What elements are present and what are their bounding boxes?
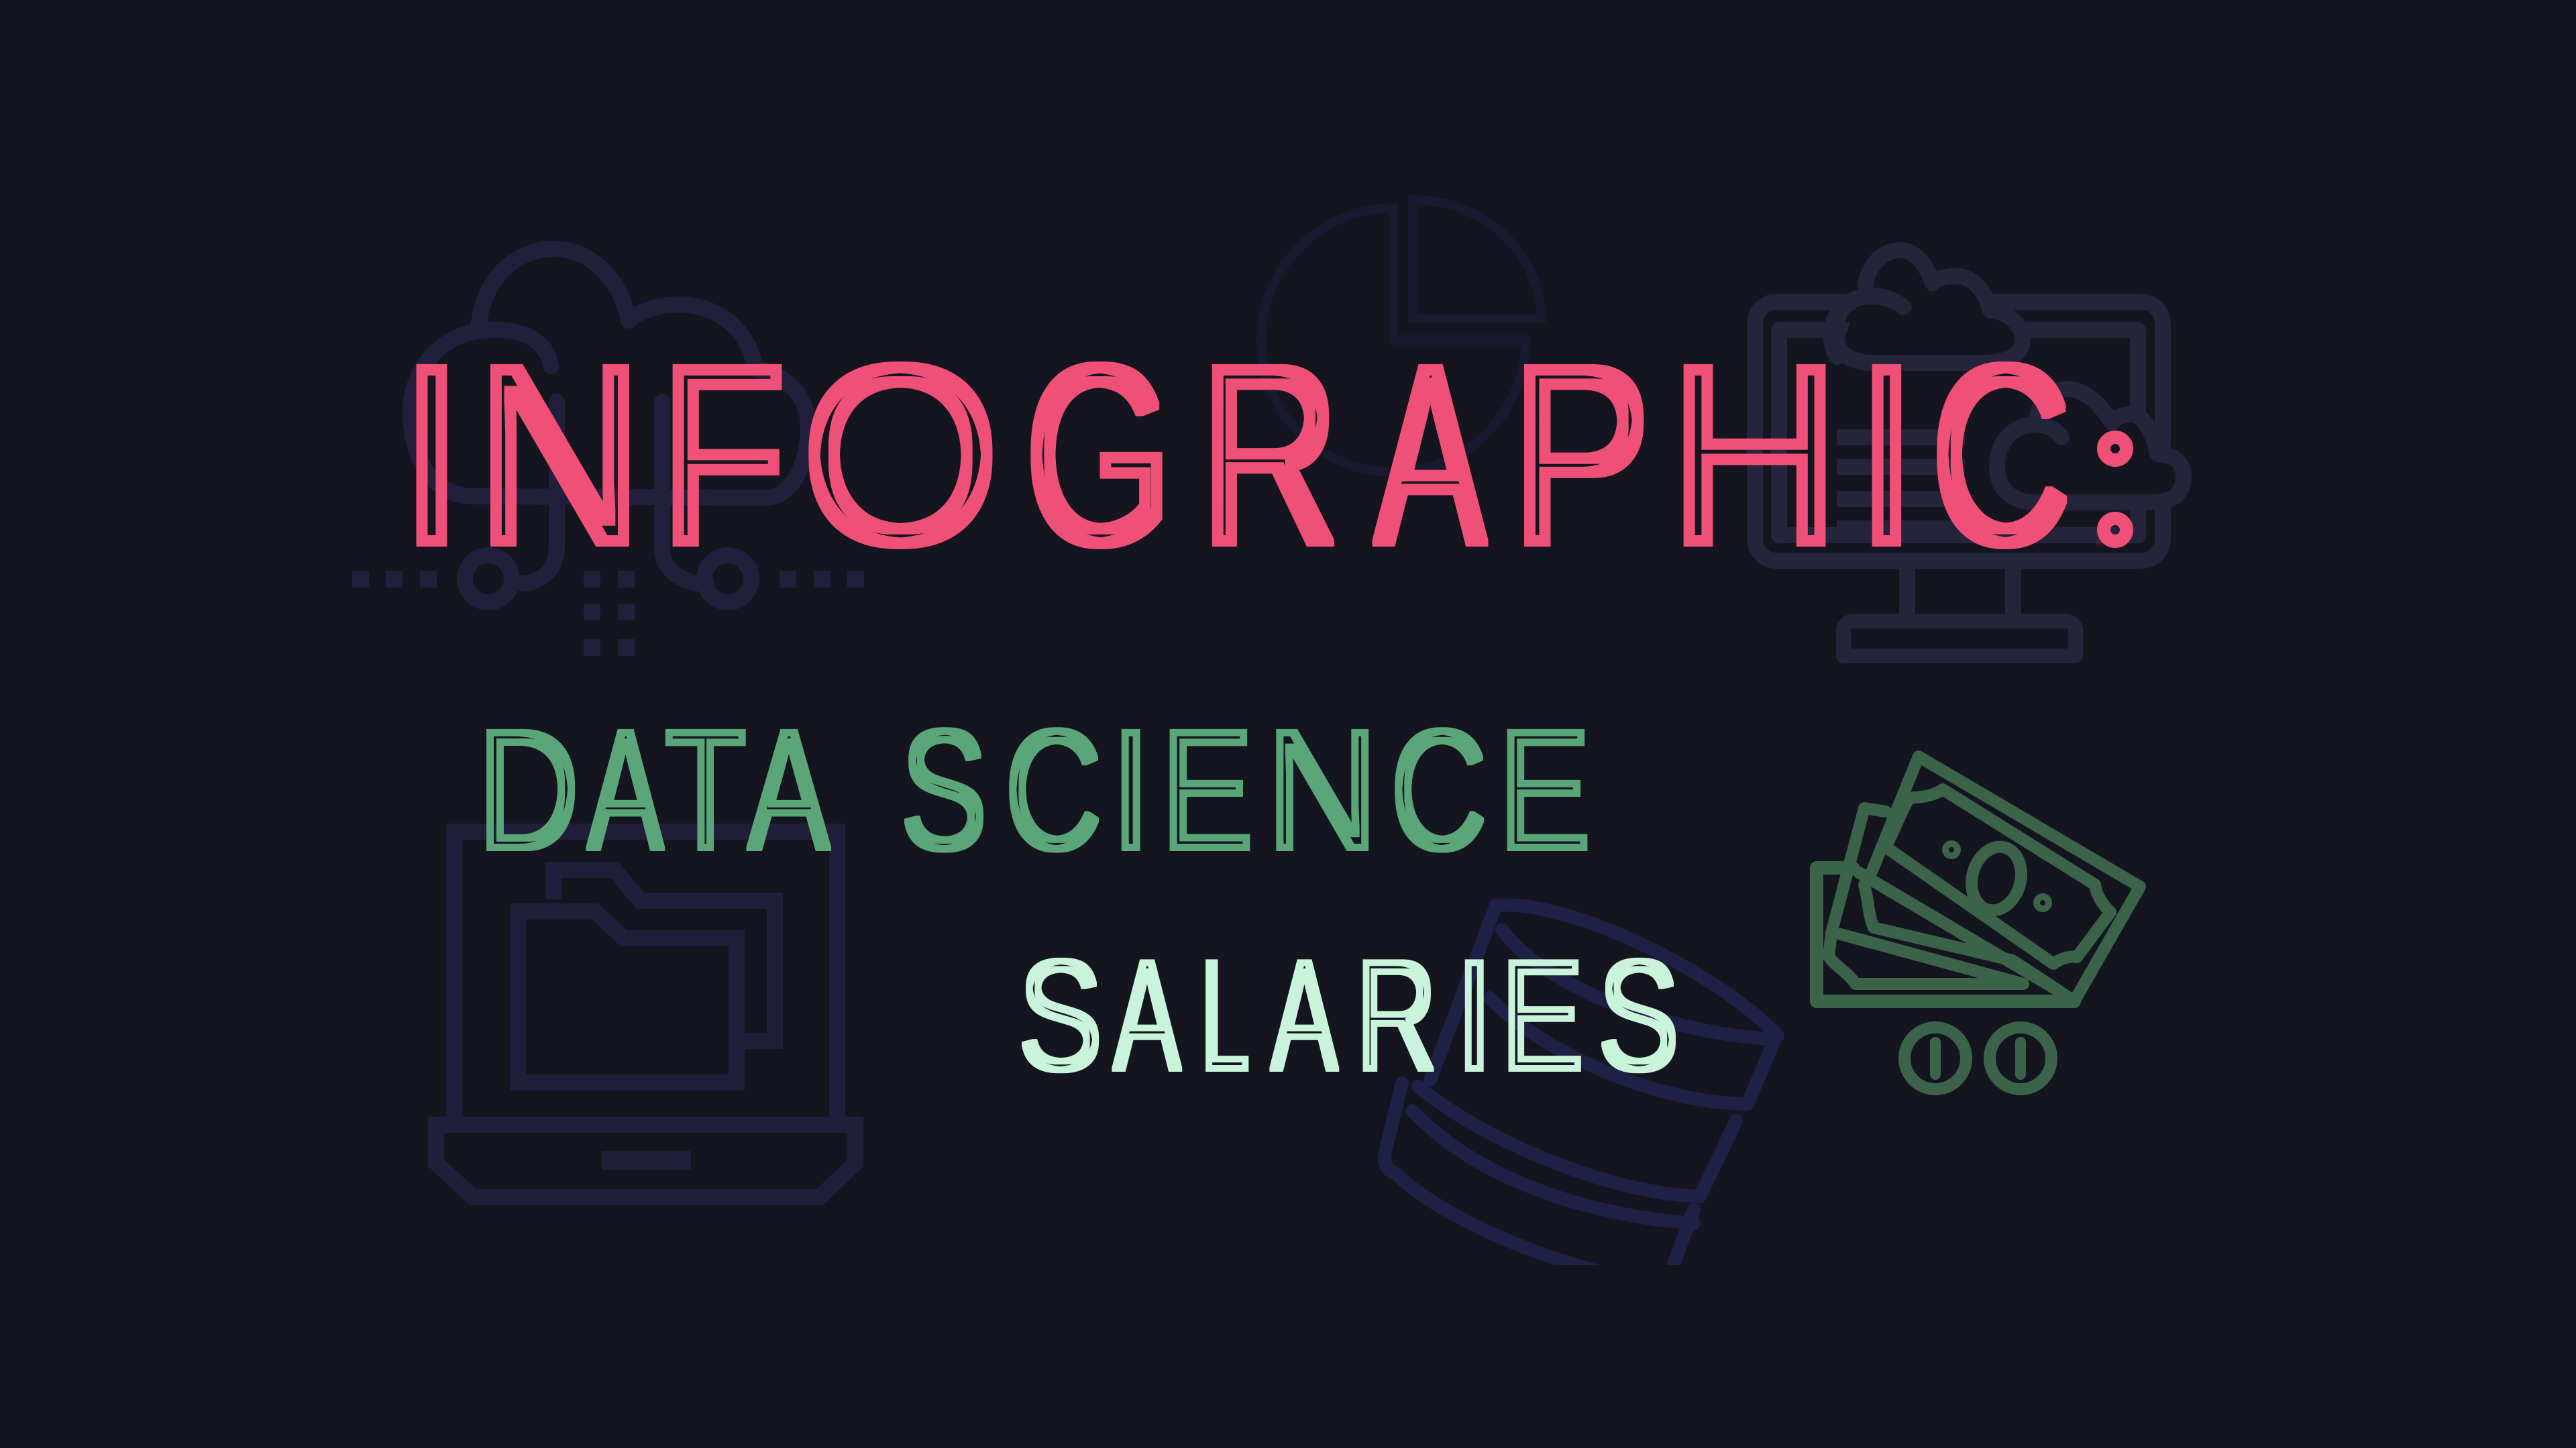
title: H (1667, 312, 1842, 598)
icon: laptop with folder (436, 832, 855, 1197)
subtitle: data science: C (1390, 694, 1487, 886)
title colon dots (2104, 437, 2127, 541)
subtitle: data science: E (1497, 694, 1591, 886)
subtitle: data science: T (664, 694, 747, 886)
subtitle: salaries: A (1271, 927, 1338, 1103)
subtitle: salaries: I (1452, 927, 1496, 1103)
title: I (396, 312, 468, 598)
title: I (1853, 312, 1920, 598)
icon: banknotes and coins (1817, 757, 2140, 1089)
icon: database stack (1385, 905, 1778, 1274)
subtitle: data science: E (1160, 694, 1254, 886)
title: O (800, 312, 1002, 598)
title: F (659, 312, 787, 598)
icon: cloud network (352, 249, 864, 656)
subtitle: salaries: S (1598, 927, 1680, 1103)
title: R (1199, 312, 1340, 598)
icon: pie chart (1261, 200, 1541, 472)
subtitle: data science: S (900, 694, 987, 886)
title: C (1931, 312, 2072, 598)
title (396, 312, 2127, 598)
subtitle: data science: I (1109, 694, 1152, 886)
subtitle: data science: N (1265, 694, 1379, 886)
subtitle: salaries: E (1500, 927, 1585, 1103)
title: P (1510, 312, 1652, 598)
subtitle: data science: A (748, 694, 830, 886)
subtitle: data science: A (588, 694, 663, 886)
subtitle: data science: C (1004, 694, 1102, 886)
title: G (1024, 312, 1173, 598)
subtitle: salaries: S (1018, 927, 1103, 1103)
title: A (1375, 312, 1486, 598)
icon: monitor with clouds (1755, 250, 2184, 656)
subtitle: salaries: R (1356, 927, 1437, 1103)
subtitle: data science: D (477, 694, 580, 886)
subtitle: salaries: L (1200, 927, 1250, 1103)
title: N (474, 312, 645, 598)
subtitle: salaries: A (1114, 927, 1181, 1103)
